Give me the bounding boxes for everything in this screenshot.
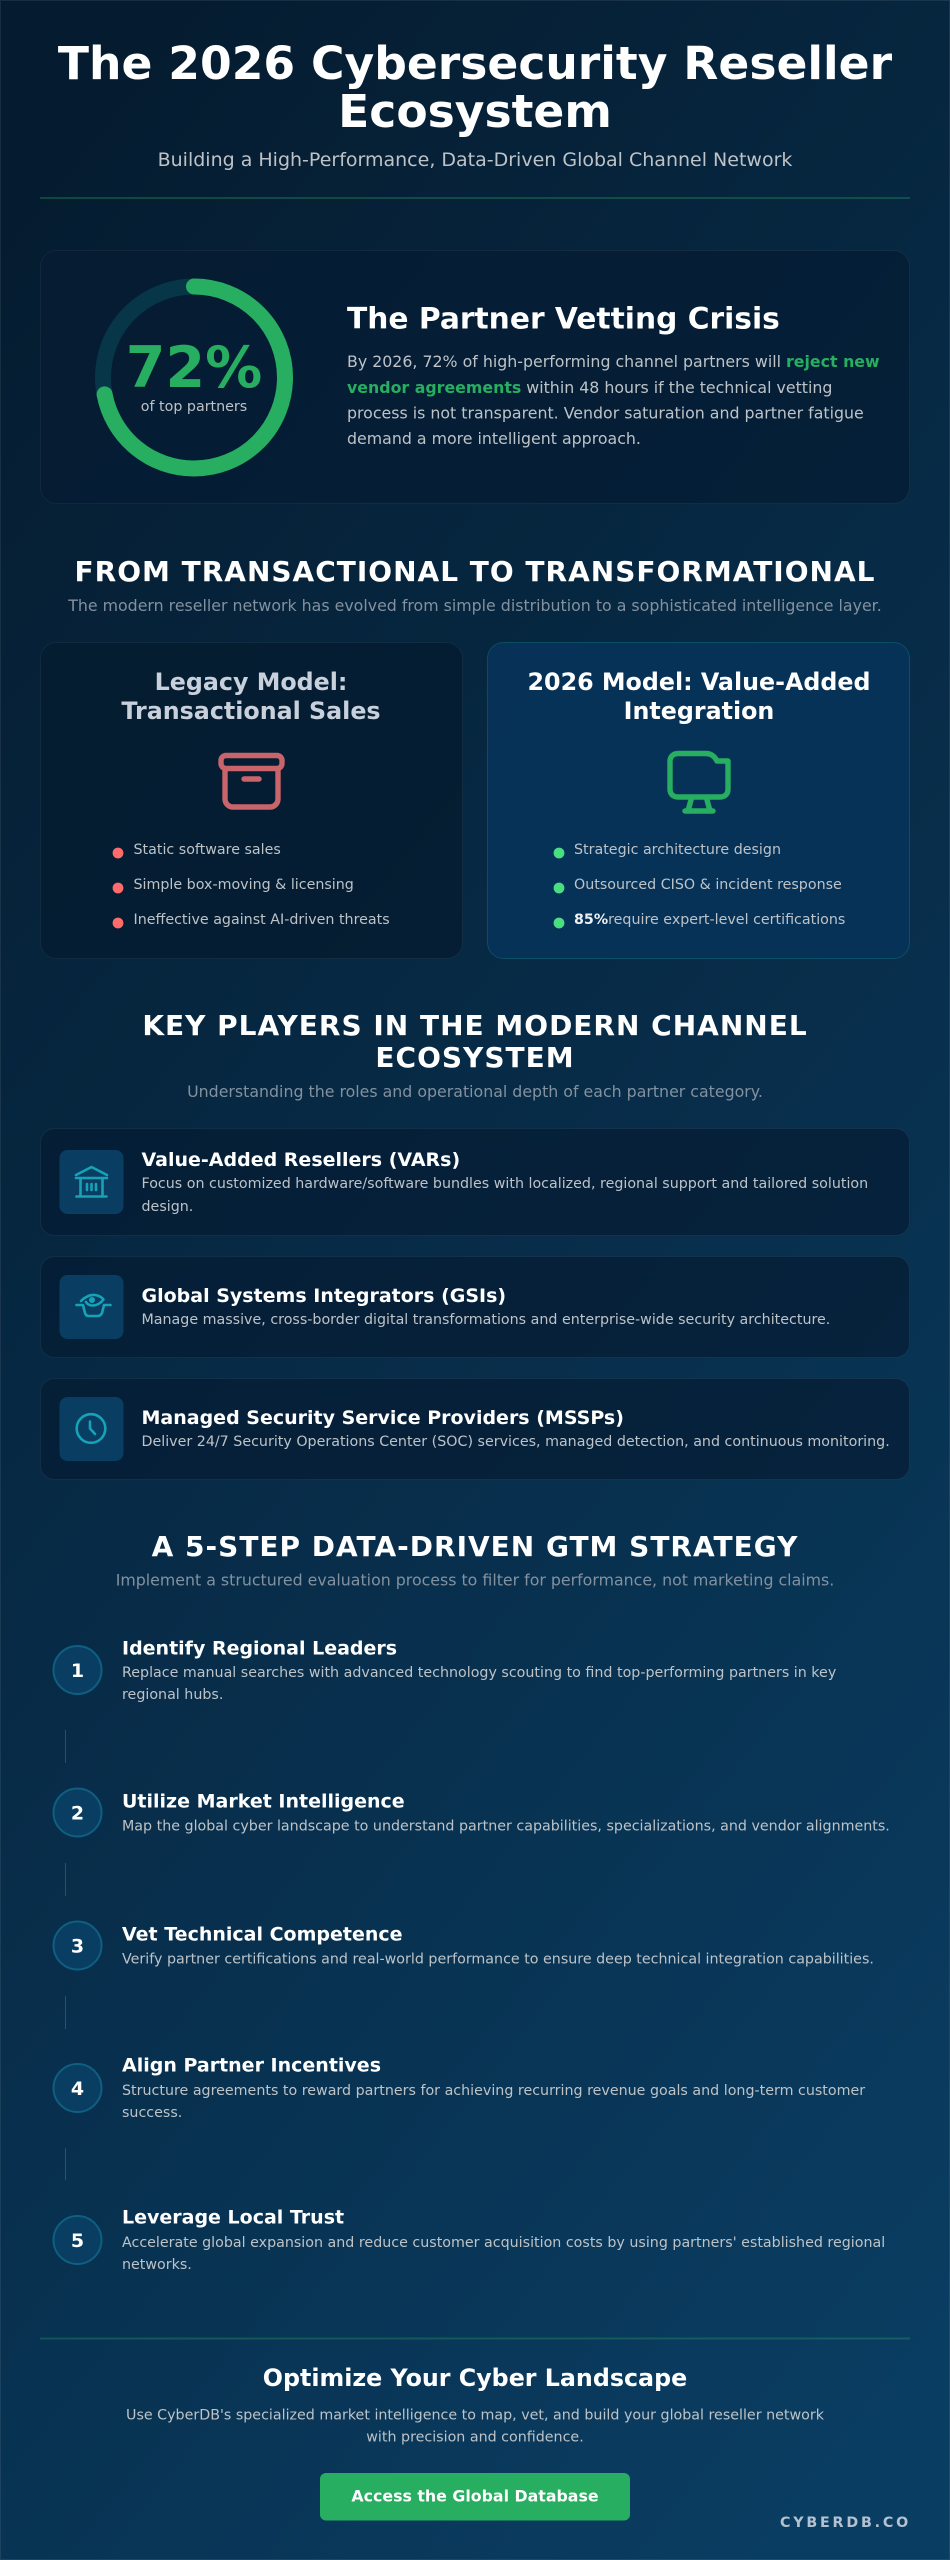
crisis description: reject new [786, 352, 880, 371]
donut chart: 72%: 72% [126, 335, 262, 401]
MSSP description: Deliver 24/7 Security Operations Center (SOC) services, managed detection, and continuous monitoring. [142, 1434, 890, 1450]
2026 model bullet list: Outsourced CISO & incident response [574, 877, 842, 893]
crisis description: process is not transparent. Vendor saturation and partner fatigue [347, 404, 864, 422]
step 4: Align Partner Incentives [122, 2054, 381, 2076]
section subtitle: Implement a structured evaluation process to filter for performance, not marketing claims. [116, 1570, 834, 1590]
section heading: key players: KEY PLAYERS IN THE MODERN CHANNEL [142, 1009, 808, 1042]
step 4: 4 [71, 2078, 84, 2100]
step 5: 5 [71, 2230, 84, 2252]
GSI title: Global Systems Integrators (GSIs) [142, 1285, 506, 1307]
step 5: Leverage Local Trust [122, 2206, 344, 2228]
2026 model bullet list: 85%require expert-level certifications [574, 912, 845, 928]
icon: archive box [221, 756, 282, 807]
step 4: Structure agreements to reward partners for achieving recurring revenue goals and long-term customer [122, 2083, 865, 2099]
CTA description: Use CyberDB's specialized market intelligence to map, vet, and build your global reseller network [126, 2408, 825, 2424]
icon: clock [60, 1397, 124, 1461]
icon: bank building [60, 1150, 124, 1214]
crisis description: within 48 hours if the technical vetting [521, 378, 832, 397]
2026 model bullet list [554, 842, 845, 928]
icon: eye over tray [60, 1275, 124, 1339]
header [58, 37, 893, 171]
crisis description: demand a more intelligent approach. [347, 429, 641, 448]
crisis description: vendor agreements [347, 378, 521, 397]
section heading: from transactional to transformational: FROM TRANSACTIONAL TO TRANSFORMATIONAL [75, 555, 875, 588]
subtitle: Building a High-Performance, Data-Driven Global Channel Network [158, 149, 792, 171]
CTA heading: Optimize Your Cyber Landscape [263, 2364, 687, 2392]
legacy heading: Legacy Model: [155, 668, 347, 696]
brand mark: CYBERDB.CO [780, 2515, 911, 2531]
section subtitle: Understanding the roles and operational depth of each partner category. [187, 1082, 763, 1101]
GSI description: Manage massive, cross-border digital transformations and enterprise-wide security architecture. [142, 1312, 830, 1328]
step 3: Verify partner certifications and real-world performance to ensure deep technical integration capabilities. [122, 1952, 874, 1968]
legacy heading: Transactional Sales [121, 697, 381, 725]
heading: the partner vetting crisis: The Partner Vetting Crisis [347, 302, 780, 336]
step 5: networks. [122, 2257, 192, 2273]
VAR description: Focus on customized hardware/software bundles with localized, regional support and tailored solution [142, 1176, 868, 1192]
panel: legacy model [40, 642, 462, 958]
card: managed security service providers [40, 1378, 910, 1480]
step 2: Map the global cyber landscape to understand partner capabilities, specializations, and vendor alignments. [122, 1818, 890, 1834]
section heading: key players: ECOSYSTEM [375, 1041, 575, 1074]
step 5 [54, 2206, 885, 2273]
icon: monitor [670, 754, 728, 811]
CTA description: with precision and confidence. [366, 2430, 584, 2446]
card: value-added resellers [40, 1128, 910, 1236]
legacy bullet list: Simple box-moving & licensing [134, 877, 354, 893]
step 3 [54, 1922, 874, 1970]
2026 model heading: 2026 Model: Value-Added [528, 668, 870, 696]
step 2 [54, 1788, 890, 1836]
panel: partner vetting crisis [40, 250, 910, 504]
step 2: 2 [71, 1802, 84, 1824]
2026 model heading: Integration [624, 697, 774, 725]
step 4: success. [122, 2105, 182, 2121]
legacy bullet list [113, 842, 390, 928]
MSSP title: Managed Security Service Providers (MSSPs) [142, 1407, 624, 1429]
step 2: Utilize Market Intelligence [122, 1790, 405, 1812]
panel: 2026 model [488, 642, 910, 958]
card: global systems integrators [40, 1256, 910, 1358]
step 1: Identify Regional Leaders [122, 1638, 397, 1660]
step 4 [54, 2054, 865, 2121]
section subtitle: The modern reseller network has evolved from simple distribution to a sophisticated intelligence layer. [67, 596, 882, 615]
step 3: 3 [71, 1936, 84, 1958]
step 1: regional hubs. [122, 1687, 223, 1703]
CTA button [320, 2473, 630, 2520]
legacy bullet list: Ineffective against AI-driven threats [134, 912, 390, 928]
step 1: 1 [71, 1660, 84, 1682]
section heading: 5-step strategy: A 5-STEP DATA-DRIVEN GTM STRATEGY [152, 1530, 798, 1563]
title: Ecosystem [338, 85, 612, 138]
title: The 2026 Cybersecurity Reseller [58, 37, 893, 90]
step 1 [54, 1638, 837, 1703]
CTA button: Access the Global Database [351, 2486, 599, 2506]
VAR description: design. [142, 1199, 193, 1215]
legacy bullet list: Static software sales [134, 842, 281, 858]
donut chart: 72%: of top partners [141, 399, 247, 415]
donut chart: 72% [103, 286, 285, 468]
step 1: Replace manual searches with advanced technology scouting to find top-performing partners in key [122, 1665, 837, 1681]
VAR title: Value-Added Resellers (VARs) [142, 1149, 460, 1171]
2026 model bullet list: Strategic architecture design [574, 842, 781, 858]
call to action [126, 2364, 825, 2520]
step 3: Vet Technical Competence [122, 1924, 403, 1946]
step 5: Accelerate global expansion and reduce customer acquisition costs by using partners' established regional [122, 2235, 885, 2251]
crisis description: By 2026, 72% of high-performing channel partners will [347, 352, 786, 371]
